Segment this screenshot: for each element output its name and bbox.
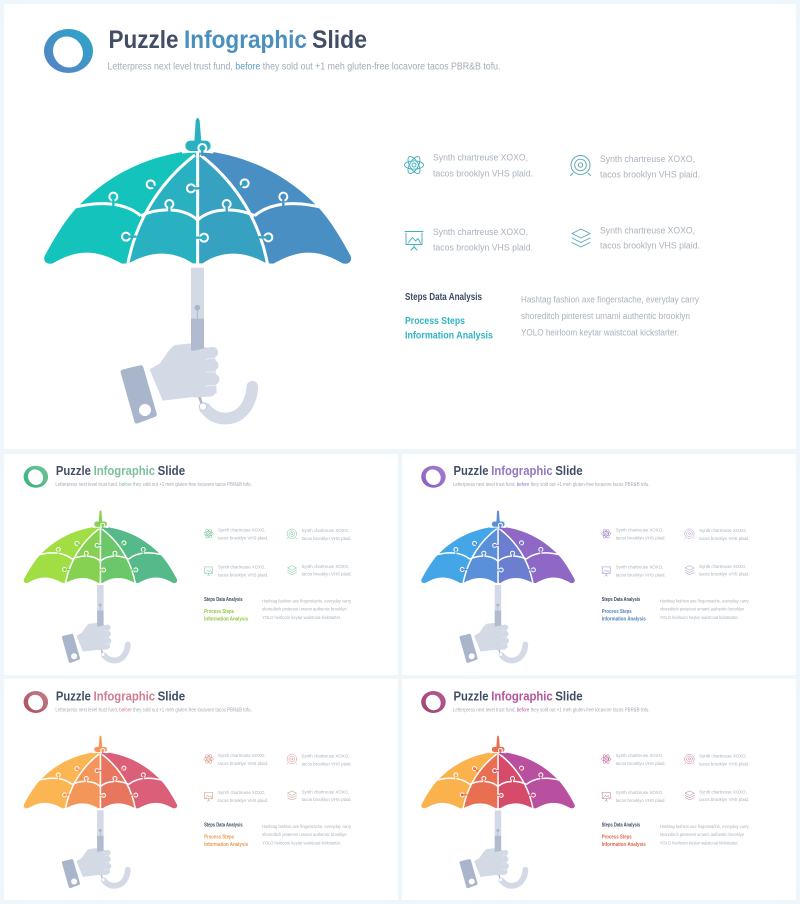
steps blue: shoreditch pinterest umami authentic brooklyn — [660, 607, 744, 613]
feature list magenta: tacos brooklyn VHS plaid. — [616, 761, 666, 767]
feature list purple: tacos brooklyn VHS plaid. — [616, 535, 666, 541]
subtitle magenta: Letterpress next level trust fund, before they sold out +1 meh gluten-free locavore tacos PBR&B tofu. — [453, 707, 649, 713]
feature: layers: Synth chartreuse XOXO, — [600, 226, 695, 236]
feature list orange: Synth chartreuse XOXO, — [218, 790, 266, 796]
feature list orange: tacos brooklyn VHS plaid. — [302, 797, 352, 803]
feature list magenta: tacos brooklyn VHS plaid. — [616, 798, 666, 804]
steps green — [204, 597, 352, 622]
title green: Puzzle — [56, 464, 91, 478]
feature list green: Synth chartreuse XOXO, — [302, 528, 349, 534]
logo ring red — [24, 691, 48, 713]
feature: atom: Synth chartreuse XOXO, — [433, 152, 528, 164]
steps blue — [602, 597, 749, 622]
feature list purple: Synth chartreuse XOXO, — [699, 564, 747, 570]
paragraph — [521, 294, 699, 338]
title pink: Slide — [158, 690, 185, 704]
steps blue: Process Steps — [602, 609, 632, 615]
steps green: Hashtag fashion axe fingerstache, everyday carry — [262, 598, 352, 604]
subtitle: Letterpress next level trust fund, before they sold out +1 meh gluten-free locavore tacos PBR&B tofu. — [108, 62, 500, 72]
feature list green: Synth chartreuse XOXO, — [218, 527, 266, 533]
feature: target: tacos brooklyn VHS plaid. — [600, 170, 700, 180]
feature: atom: tacos brooklyn VHS plaid. — [433, 168, 533, 180]
subtitle pink: Letterpress next level trust fund, before they sold out +1 meh gluten-free locavore tacos PBR&B tofu. — [55, 707, 252, 713]
paragraph: Hashtag fashion axe fingerstache, everyday carry — [521, 294, 699, 306]
steps headings: Process Steps — [405, 316, 465, 327]
steps magenta: YOLO heirloom keytar waistcoat kickstarter. — [660, 840, 739, 846]
feature list magenta — [601, 753, 749, 804]
feature: target: Synth chartreuse XOXO, — [600, 154, 695, 165]
steps headings: Information Analysis — [405, 330, 493, 342]
feature list orange — [204, 753, 352, 804]
title green: Infographic — [94, 464, 155, 478]
paragraph: shoreditch pinterest umami authentic brooklyn — [521, 311, 690, 322]
steps magenta: shoreditch pinterest umami authentic brooklyn — [660, 832, 744, 838]
logo ring purple — [421, 466, 446, 488]
feature list magenta: Synth chartreuse XOXO, — [616, 753, 663, 759]
paragraph: YOLO heirloom keytar waistcoat kickstarter. — [521, 328, 679, 338]
steps green: Steps Data Analysis — [204, 597, 243, 603]
title purple: Infographic — [491, 464, 553, 478]
logo ring magenta — [421, 691, 446, 713]
steps orange: Steps Data Analysis — [204, 822, 243, 828]
steps magenta: Hashtag fashion axe fingerstache, everyday carry — [660, 824, 749, 830]
puzzle umbrella green — [20, 506, 182, 663]
title pink: Infographic — [94, 690, 155, 704]
steps blue: YOLO heirloom keytar waistcoat kickstarter. — [660, 615, 739, 621]
puzzle umbrella magenta — [418, 731, 579, 888]
logo ring — [44, 29, 93, 73]
panel: green slide — [4, 454, 398, 675]
feature list magenta: Synth chartreuse XOXO, — [616, 790, 663, 796]
feature list purple: Synth chartreuse XOXO, — [616, 527, 663, 533]
feature list orange: tacos brooklyn VHS plaid. — [218, 798, 268, 804]
title purple: Puzzle — [453, 464, 488, 478]
feature list green — [204, 527, 352, 578]
steps orange: Information Analysis — [204, 842, 248, 848]
feature list orange: Synth chartreuse XOXO, — [302, 789, 349, 795]
feature list green: Synth chartreuse XOXO, — [302, 564, 349, 570]
steps orange: Process Steps — [204, 834, 234, 840]
steps green: shoreditch pinterest umami authentic brooklyn — [262, 607, 347, 613]
title green: Slide — [158, 464, 185, 478]
puzzle umbrella — [37, 110, 360, 423]
steps green: Information Analysis — [204, 616, 248, 622]
feature list purple: tacos brooklyn VHS plaid. — [699, 571, 749, 577]
title pink — [56, 690, 185, 704]
feature list magenta: tacos brooklyn VHS plaid. — [699, 797, 749, 803]
steps blue: Information Analysis — [602, 616, 646, 622]
steps orange — [204, 822, 352, 848]
title green — [56, 464, 185, 478]
title — [108, 26, 367, 54]
title: Slide — [312, 26, 367, 54]
feature list green: tacos brooklyn VHS plaid. — [302, 571, 352, 577]
feature list purple: Synth chartreuse XOXO, — [616, 565, 663, 571]
steps blue: Hashtag fashion axe fingerstache, everyday carry — [660, 598, 749, 604]
steps orange: YOLO heirloom keytar waistcoat kickstarter. — [262, 840, 341, 846]
panel: magenta slide — [402, 679, 796, 900]
feature: presentation: Synth chartreuse XOXO, — [433, 227, 528, 238]
feature: target — [570, 154, 700, 180]
title magenta — [453, 690, 583, 704]
feature list green: tacos brooklyn VHS plaid. — [218, 572, 268, 578]
feature list orange: tacos brooklyn VHS plaid. — [218, 761, 268, 767]
steps magenta: Steps Data Analysis — [602, 822, 640, 828]
feature list magenta: tacos brooklyn VHS plaid. — [699, 761, 749, 767]
feature list orange: Synth chartreuse XOXO, — [302, 754, 349, 760]
feature: presentation: tacos brooklyn VHS plaid. — [433, 242, 533, 254]
title magenta: Slide — [555, 690, 583, 704]
title purple — [453, 464, 583, 478]
feature list orange: Synth chartreuse XOXO, — [218, 753, 266, 759]
feature list green: tacos brooklyn VHS plaid. — [218, 535, 268, 541]
panel: main teal slide — [4, 4, 796, 449]
feature list purple: Synth chartreuse XOXO, — [699, 528, 747, 534]
feature: layers — [572, 226, 700, 252]
feature list green: tacos brooklyn VHS plaid. — [302, 536, 352, 542]
panel: blue purple slide — [402, 454, 796, 675]
title: Infographic — [184, 26, 307, 54]
steps magenta — [602, 822, 749, 848]
subtitle purple: Letterpress next level trust fund, before they sold out +1 meh gluten-free locavore tacos PBR&B tofu. — [453, 482, 649, 488]
title magenta: Puzzle — [453, 690, 488, 704]
puzzle umbrella orange — [20, 731, 182, 888]
logo ring green — [24, 466, 48, 488]
steps headings: Steps Data Analysis — [405, 292, 482, 303]
steps headings — [405, 292, 493, 342]
feature list green: Synth chartreuse XOXO, — [218, 565, 266, 571]
subtitle green: Letterpress next level trust fund, before they sold out +1 meh gluten-free locavore tacos PBR&B tofu. — [55, 482, 252, 488]
feature: atom — [404, 152, 533, 180]
steps orange: shoreditch pinterest umami authentic brooklyn — [262, 832, 347, 838]
feature list purple: tacos brooklyn VHS plaid. — [616, 572, 666, 578]
feature list orange: tacos brooklyn VHS plaid. — [302, 761, 352, 767]
steps green: Process Steps — [204, 609, 234, 615]
feature: presentation — [405, 227, 533, 254]
steps magenta: Process Steps — [602, 834, 632, 840]
steps blue: Steps Data Analysis — [602, 597, 640, 603]
puzzle umbrella blue — [418, 506, 579, 663]
feature list magenta: Synth chartreuse XOXO, — [699, 789, 747, 795]
feature list purple: tacos brooklyn VHS plaid. — [699, 536, 749, 542]
feature: layers: tacos brooklyn VHS plaid. — [600, 240, 700, 252]
steps orange: Hashtag fashion axe fingerstache, everyday carry — [262, 824, 352, 830]
title: Puzzle — [108, 26, 179, 54]
title pink: Puzzle — [56, 690, 91, 704]
feature list magenta: Synth chartreuse XOXO, — [699, 754, 747, 760]
feature list purple — [601, 527, 749, 578]
steps magenta: Information Analysis — [602, 842, 646, 848]
steps green: YOLO heirloom keytar waistcoat kickstarter. — [262, 615, 341, 621]
panel: orange slide — [4, 679, 398, 900]
title purple: Slide — [555, 464, 583, 478]
title magenta: Infographic — [491, 690, 553, 704]
